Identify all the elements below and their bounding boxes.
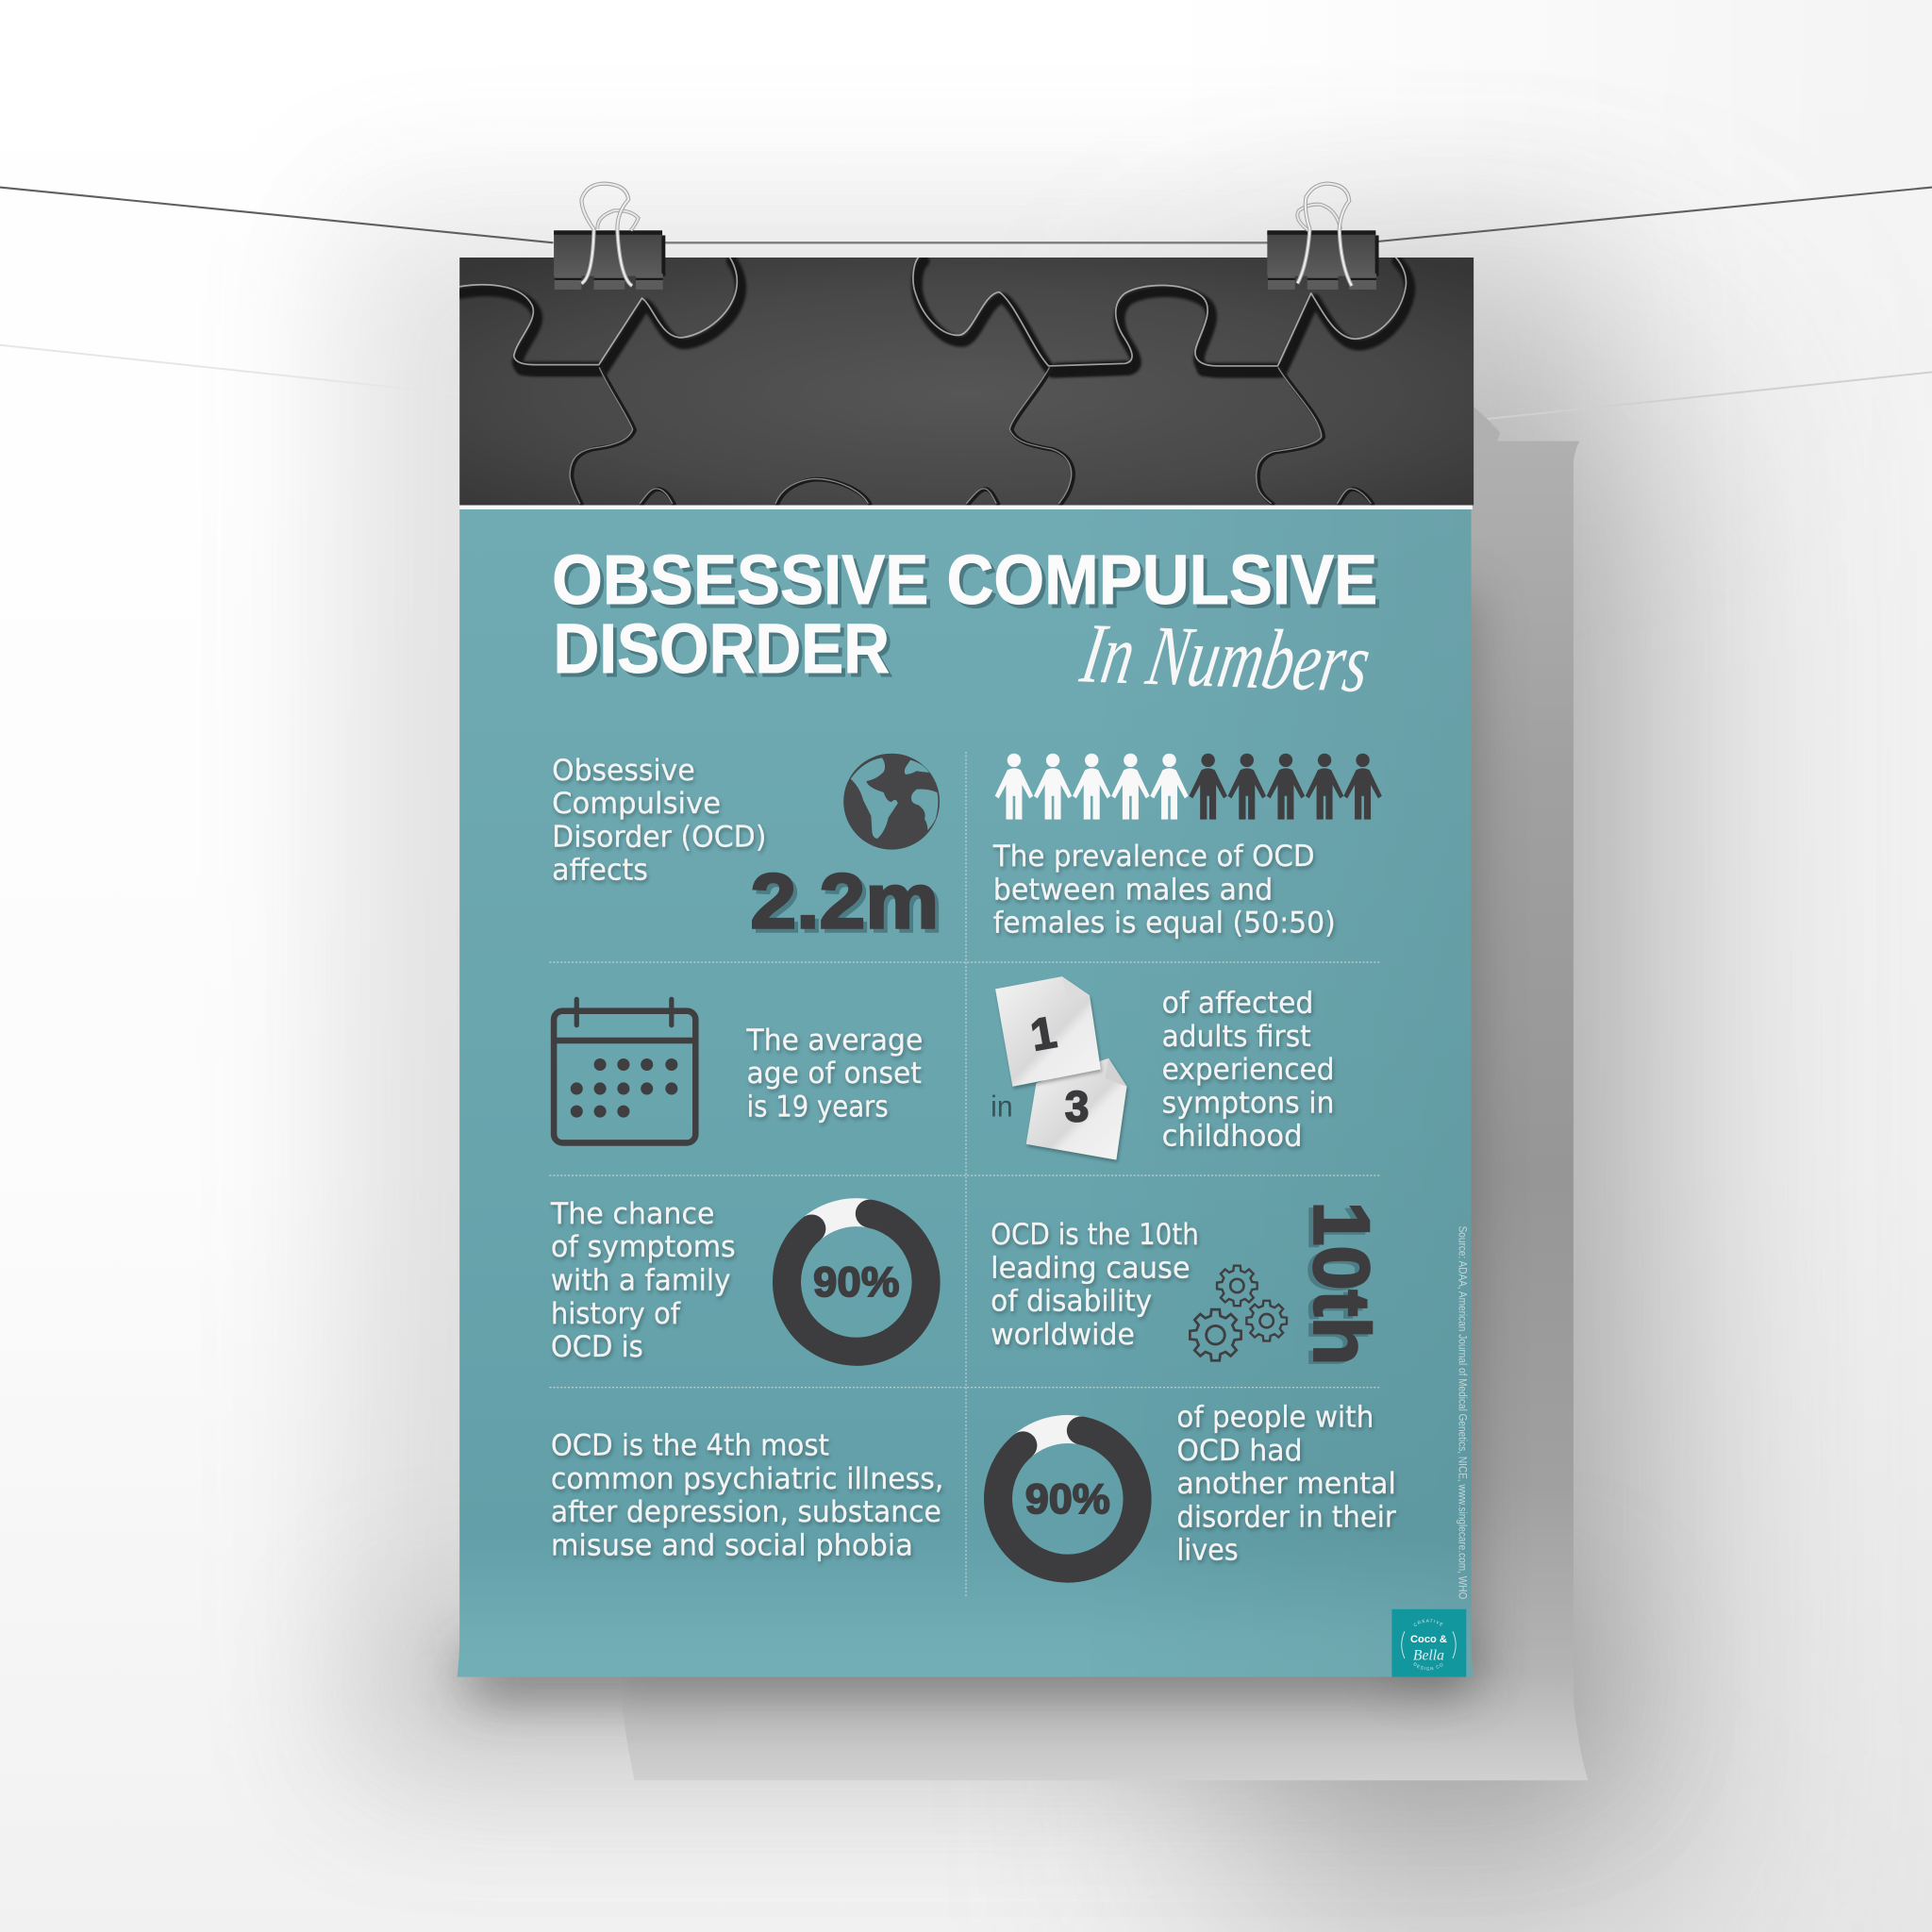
icon: gears	[1190, 1266, 1287, 1360]
text: people with OCD: OCD had	[1176, 1435, 1303, 1468]
icon: paper sheet 1: 1	[1027, 1007, 1060, 1060]
text: prevalence	[992, 841, 1336, 941]
text: people with OCD: disorder in their	[1176, 1501, 1396, 1534]
title: DISORDER	[557, 613, 893, 691]
icon: globe	[843, 754, 940, 850]
panel: 4th most common: after depression, substance	[551, 1496, 941, 1529]
text: OCD affects: affects	[552, 855, 648, 888]
text: 10th leading cause: OCD is the 10th	[991, 1219, 1199, 1252]
faint background wires	[0, 345, 1932, 419]
text: affected adults: experienced	[1162, 1054, 1335, 1087]
chart: 90 percent donut comorbidity: 90%	[1025, 1476, 1110, 1523]
chart: 90 percent donut	[787, 1212, 926, 1352]
text: 10th leading cause	[991, 1219, 1199, 1352]
chart: 90 percent donut comorbidity	[998, 1429, 1138, 1569]
text: chance of symptoms: The chance	[550, 1198, 715, 1231]
panel: age of onset	[553, 997, 923, 1142]
text: people with OCD: of people with	[1176, 1401, 1374, 1434]
text: average age: is 19 years	[747, 1091, 889, 1124]
icon: right binder clip	[1267, 184, 1379, 290]
text: prevalence: females is equal (50:50)	[993, 908, 1336, 941]
text: 10th leading cause: leading cause	[991, 1252, 1191, 1285]
stat: 2.2m: 2.2m	[750, 859, 939, 945]
stat: 2.2m: 2.2m	[754, 862, 942, 948]
poster teal body	[458, 508, 1474, 1677]
white divider under header	[459, 506, 1473, 509]
title: DISORDER	[553, 609, 890, 688]
logo: Coco and Bella: DESIGN CO	[1413, 1662, 1443, 1671]
text: affected adults	[1162, 988, 1335, 1154]
panel: 4th most common: common psychiatric illness,	[551, 1463, 943, 1496]
text: chance of symptoms	[550, 1198, 736, 1364]
text: 10th leading cause: worldwide	[991, 1319, 1135, 1352]
panel: male female prevalence	[992, 754, 1382, 941]
text: affected adults: of affected	[1162, 988, 1313, 1021]
title: OBSESSIVE COMPULSIVE	[552, 541, 1377, 619]
hanging wire	[0, 188, 1932, 242]
text: 10th leading cause: of disability	[991, 1286, 1152, 1319]
text: affected adults: symptons in	[1162, 1087, 1335, 1120]
text: OCD affects: Compulsive	[552, 788, 721, 821]
panel: 1 in 3	[991, 976, 1335, 1159]
panel: 4th most common: OCD is the 4th most	[551, 1430, 829, 1463]
panel: puzzle header image	[458, 255, 1474, 506]
hard poster shadow on wall	[591, 394, 1602, 1787]
title: OBSESSIVE COMPULSIVE	[556, 544, 1381, 623]
title	[552, 541, 1381, 691]
text: affected adults: adults first	[1162, 1021, 1311, 1054]
icon: left binder clip	[554, 184, 665, 290]
panel: leading cause of disability	[991, 1201, 1387, 1368]
chart: 90 percent donut: 90%	[813, 1259, 899, 1306]
text: chance of symptoms: with a family	[551, 1265, 731, 1298]
text: people with OCD: another mental	[1176, 1468, 1396, 1501]
subtitle: In Numbers: In Numbers	[1074, 607, 1377, 710]
text: OCD affects: Obsessive	[552, 755, 695, 788]
puzzle piece outlines	[458, 255, 1409, 504]
icon: paper sheet 3: 3	[1065, 1083, 1089, 1131]
panel: 4th most common	[551, 1430, 943, 1562]
panel: global prevalence	[552, 754, 942, 948]
logo: Coco and Bella	[1391, 1609, 1466, 1677]
icon: calendar	[553, 997, 696, 1142]
panel: comorbidity	[998, 1401, 1396, 1569]
text: prevalence: The prevalence of OCD	[992, 841, 1315, 874]
text: OCD affects	[552, 755, 766, 888]
icon: row of people	[995, 754, 1382, 820]
text: average age	[746, 1024, 923, 1124]
icon: paper sheet 3	[1026, 1058, 1126, 1159]
panel: family history	[550, 1198, 926, 1364]
logo: Coco and Bella: CREATIVE	[1413, 1619, 1443, 1626]
logo: Coco and Bella: Bella	[1413, 1647, 1444, 1663]
text: OCD affects: Disorder (OCD)	[552, 821, 766, 854]
dotted grid dividers	[550, 752, 1381, 1597]
text: average age: The average	[746, 1024, 923, 1058]
text: chance of symptoms: history of	[551, 1298, 681, 1331]
text: chance of symptoms: OCD is	[551, 1331, 643, 1364]
text: affected adults: childhood	[1162, 1121, 1303, 1154]
panel: 4th most common: misuse and social phobia	[551, 1529, 913, 1562]
text: in: in	[991, 1090, 1013, 1123]
stat: 10th rotated: 10th	[1292, 1204, 1381, 1368]
text: people with OCD	[1176, 1401, 1396, 1568]
text: prevalence: between males and	[993, 874, 1273, 907]
text: chance of symptoms: of symptoms	[551, 1231, 736, 1264]
text: average age: age of onset	[747, 1058, 922, 1091]
source note: Source: ADAA, American Journal of Medical Genetics, NICE, www.singlecare.com, WHO	[1456, 1226, 1469, 1600]
stat: 10th rotated: 10th	[1298, 1201, 1387, 1365]
logo: Coco and Bella: Coco &	[1410, 1634, 1447, 1645]
text: people with OCD: lives	[1176, 1535, 1239, 1568]
icon: paper sheet 1	[995, 976, 1101, 1087]
